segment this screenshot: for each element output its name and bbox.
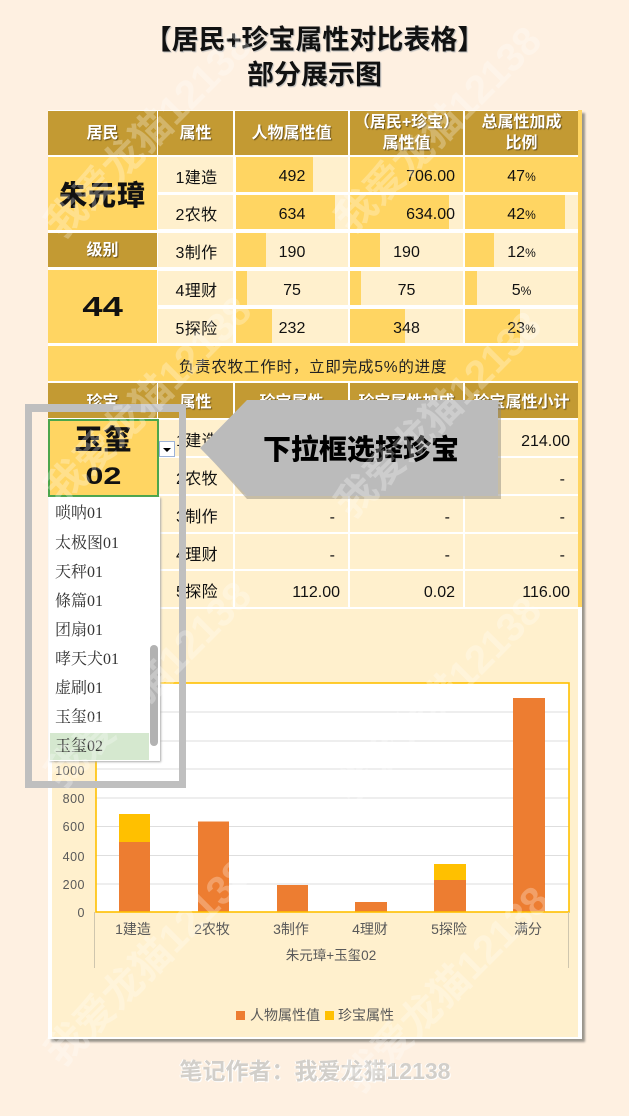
x axis title: 朱元璋+玉玺02: [286, 948, 376, 963]
y axis labels: [55, 764, 85, 920]
header: total bonus ratio: 比例: [505, 135, 538, 152]
treasure bonus column: -: [445, 546, 450, 564]
yellow right edge strip: [578, 110, 582, 607]
watermarks: 我爱龙猫12138: [37, 288, 260, 511]
header: treasure subtotal: [465, 383, 578, 418]
treasure subtotal column: 214.00: [521, 433, 570, 450]
highlight frame around dropdown: [25, 404, 186, 788]
column: character values with data bars: 634: [279, 206, 305, 222]
y axis labels: 0: [78, 906, 85, 920]
dropdown items: 团扇01: [55, 622, 103, 639]
title: [145, 25, 484, 90]
x axis labels: 4理财: [352, 921, 388, 937]
column: combined values with data bars: 348: [393, 320, 420, 336]
x axis labels: 满分: [514, 921, 542, 937]
treasure subtotal column: -: [560, 471, 565, 488]
arrow callout: [200, 400, 501, 499]
column: combined values with data bars: 634.00: [406, 206, 455, 222]
treasure attribute names: [159, 420, 233, 607]
attribute names: [158, 157, 233, 343]
attribute names: 5探险: [175, 321, 218, 338]
header: total bonus ratio: [465, 111, 578, 155]
dropdown items: 條篇01: [55, 593, 103, 610]
header: total bonus ratio: 总属性加成: [481, 114, 562, 131]
cream chart background: [52, 609, 578, 1037]
level header: [48, 233, 157, 267]
y axis labels: 400: [63, 850, 85, 864]
dropdown items: 玉玺01: [55, 709, 103, 726]
panel: data table and chart card: [48, 110, 582, 1039]
bars: character attribute: [119, 698, 545, 912]
treasure value column: 112.00: [292, 584, 340, 601]
legend: 人物属性值: [250, 1007, 320, 1023]
x axis labels: 3制作: [273, 921, 309, 937]
y axis labels: 600: [63, 820, 85, 834]
header: resident: 居民: [86, 124, 118, 142]
attribute names: 2农牧: [175, 207, 218, 224]
dropdown items: 哮天犬01: [55, 651, 119, 668]
footer author note: 笔记作者：我爱龙猫12138: [180, 1058, 450, 1084]
dropdown items: [55, 504, 119, 755]
title: 部分展示图: [247, 60, 382, 90]
treasure attribute names: 3制作: [176, 509, 218, 526]
header: treasure bonus: 珍宝属性加成: [358, 394, 454, 411]
treasure attribute names: 4理财: [176, 546, 218, 564]
header: treasure value: 珍宝属性: [259, 394, 324, 411]
header: treasure: [48, 383, 157, 418]
watermarks: 我爱龙猫12138: [37, 851, 260, 1074]
treasure bonus column: -: [445, 509, 450, 526]
watermarks: 我爱龙猫12138: [335, 878, 558, 1101]
treasure subtotal column: -: [560, 546, 565, 564]
bars: treasure attribute: [119, 814, 466, 880]
header: resident plus treasure value: [350, 111, 463, 155]
header: attribute: 属性: [179, 124, 212, 142]
column: combined values with data bars: 190: [393, 244, 420, 260]
selected treasure cell: 玉玺: [74, 424, 132, 455]
column: bonus ratio with data bars: 42%: [507, 206, 536, 222]
level header: 级别: [86, 242, 118, 258]
dropdown scrollbar: [150, 645, 158, 746]
column: character values with data bars: 75: [283, 282, 301, 298]
legend: 珍宝属性: [338, 1007, 394, 1023]
watermarks: 我爱龙猫12138: [37, 23, 260, 246]
level value: 44: [82, 290, 123, 322]
treasure attribute names: 2农牧: [176, 471, 218, 488]
column: bonus ratio with data bars: 5%: [512, 282, 531, 298]
y axis labels: 800: [63, 792, 85, 806]
x axis labels: 2农牧: [194, 921, 230, 937]
column: character values with data bars: 492: [279, 168, 305, 185]
header: treasure subtotal: 珍宝属性小计: [473, 394, 570, 411]
column: combined values with data bars: 706.00: [406, 168, 455, 185]
attribute names: 3制作: [175, 245, 218, 262]
treasure bonus column: [350, 496, 463, 607]
header: treasure: 珍宝: [86, 394, 118, 411]
header: treasure value: [235, 383, 348, 418]
selected treasure cell: 02: [85, 463, 122, 490]
column: character values with data bars: 190: [279, 244, 305, 260]
stacked bar chart: [55, 682, 570, 1023]
treasure attribute names: 5探险: [176, 584, 218, 601]
attribute names: 4理财: [175, 283, 218, 300]
dropdown arrow button: [159, 441, 175, 457]
treasure subtotal column: 116.00: [522, 584, 570, 601]
dropdown items: 天秤01: [55, 564, 103, 581]
resident skill note: [48, 346, 578, 381]
treasure value column: -: [330, 509, 335, 526]
header: attribute: [158, 111, 233, 155]
y axis labels: 200: [63, 878, 85, 892]
treasure subtotal column: [465, 420, 578, 607]
column: bonus ratio with data bars: 23%: [507, 320, 536, 336]
treasure value column: -: [330, 546, 335, 564]
watermarks: 我爱龙猫12138: [37, 573, 260, 796]
header: treasure bonus: [350, 383, 463, 418]
watermarks: 我爱龙猫12138: [327, 18, 550, 241]
dropdown items: 唢呐01: [55, 505, 103, 522]
column: combined values with data bars: [350, 157, 463, 343]
dropdown items: 虚刷01: [55, 680, 103, 697]
y axis labels: 1000: [55, 764, 85, 778]
x axis labels: [115, 921, 542, 937]
resident skill note: 负责农牧工作时，立即完成5%的进度: [179, 358, 447, 376]
header: resident plus treasure value: 属性值: [382, 135, 430, 152]
treasure value column: [235, 484, 348, 607]
watermarks: 我爱龙猫12138: [327, 588, 550, 811]
column: character values with data bars: [236, 157, 348, 343]
header: character value: [235, 111, 348, 155]
title: 【居民+珍宝属性对比表格】: [145, 25, 484, 55]
legend: [236, 1007, 394, 1023]
treasure bonus column: 0.02: [424, 584, 455, 601]
plot area: [96, 683, 569, 912]
x axis labels: 1建造: [115, 921, 151, 937]
table: treasure attributes: [48, 383, 578, 607]
dropdown items: 太极图01: [55, 535, 119, 552]
column: bonus ratio with data bars: 47%: [507, 168, 536, 185]
header: resident plus treasure value: （居民+珍宝）: [354, 114, 459, 131]
resident name: [48, 157, 157, 230]
dropdown items: 玉玺02: [55, 738, 103, 755]
selected item highlight: [50, 733, 149, 760]
level value: [48, 270, 157, 343]
column: bonus ratio with data bars: [465, 157, 578, 343]
callout text: 下拉框选择珍宝: [263, 434, 459, 465]
treasure attribute names: 1建造: [176, 433, 218, 450]
dropdown list: [49, 497, 160, 761]
resident name: 朱元璋: [59, 180, 146, 210]
selected treasure cell: [48, 419, 159, 497]
column: combined values with data bars: 75: [398, 282, 415, 298]
column: bonus ratio with data bars: 12%: [507, 244, 536, 260]
header: attribute: 属性: [179, 394, 212, 411]
treasure subtotal column: -: [560, 509, 565, 526]
column: character values with data bars: 232: [279, 320, 305, 336]
attribute names: 1建造: [175, 170, 218, 186]
plot border: [96, 683, 569, 912]
watermarks: 我爱龙猫12138: [327, 303, 550, 526]
header: attribute: [158, 383, 233, 418]
header: resident: [48, 111, 157, 155]
header: character value: 人物属性值: [251, 124, 332, 142]
x axis labels: 5探险: [431, 921, 467, 937]
table: resident attributes: [48, 111, 578, 381]
